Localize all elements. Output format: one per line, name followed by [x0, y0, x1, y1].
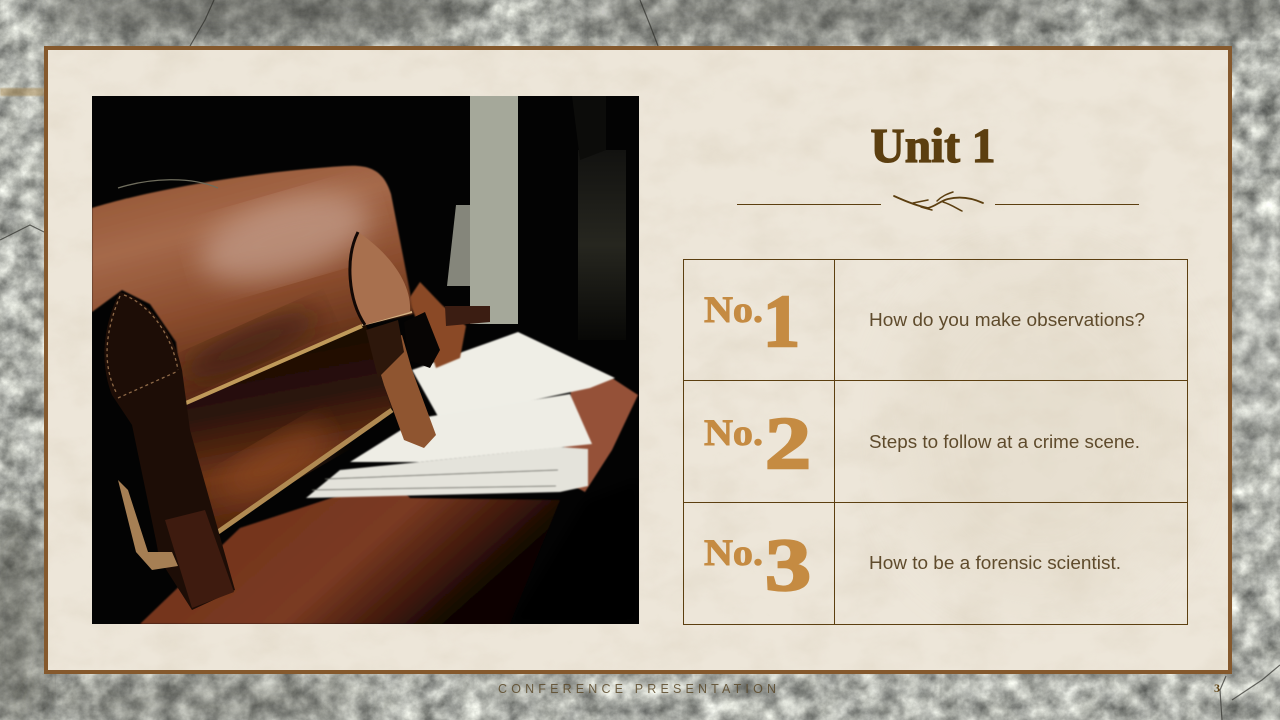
row 2: question: Steps to follow at a crime scene.: [869, 432, 1140, 452]
row 2: number: [704, 403, 811, 485]
photo: left strap with stitching: [104, 292, 235, 610]
row 3: number: [704, 525, 811, 607]
photo: leather flap: [92, 166, 413, 404]
photo: leather satchel resting on papers: [92, 96, 639, 624]
title divider with twig ornament: [737, 192, 1139, 211]
row 3: number: 3: [765, 525, 811, 607]
page number: 3: [1214, 681, 1220, 695]
photo: rust cloth surface: [140, 494, 560, 624]
icon: twig ornament: [894, 192, 983, 211]
row 1: number: No.: [704, 290, 763, 331]
row 2: number: 2: [765, 403, 811, 485]
photo background: pale column and shelves: [447, 96, 626, 340]
photo: flap closure tab and front buckle strap: [350, 232, 410, 325]
row 3: number: No.: [704, 533, 763, 574]
unit table: [684, 260, 1188, 624]
row 2: number: No.: [704, 413, 763, 454]
title: Unit 1: [870, 118, 996, 173]
photo: rear strap and dark buckle area: [408, 282, 466, 368]
row 1: number: 1: [763, 281, 800, 363]
photo: satchel body: [158, 325, 392, 552]
row 1: question: How do you make observations?: [869, 310, 1145, 330]
photo: stacked white papers: [306, 332, 615, 498]
row 1: number: [704, 281, 800, 363]
footer label: CONFERENCE PRESENTATION: [498, 682, 776, 696]
photo: corner vignette: [510, 480, 639, 624]
row 3: question: How to be a forensic scientist.: [869, 553, 1121, 573]
